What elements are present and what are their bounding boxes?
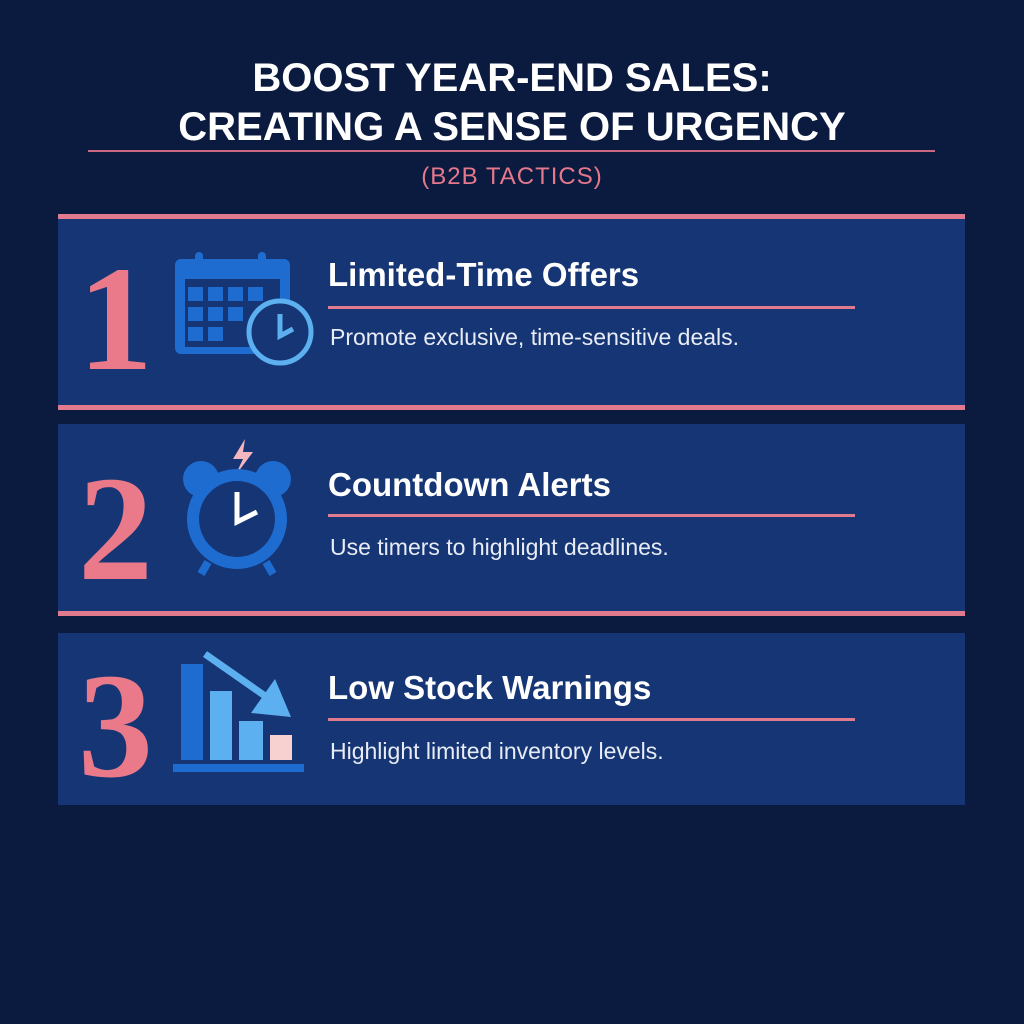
icon: alarm clock [183, 439, 291, 576]
title [178, 56, 846, 149]
number 3: 3 [78, 643, 153, 809]
panel: low stock warnings [58, 633, 965, 805]
icon: declining bar chart [173, 651, 304, 772]
number 1: 1 [78, 236, 153, 402]
icon: calendar clock [175, 252, 314, 366]
description: Highlight limited inventory levels. [330, 738, 664, 764]
description: Promote exclusive, time-sensitive deals. [330, 324, 739, 350]
title: BOOST YEAR-END SALES: [252, 56, 772, 100]
panel: countdown alerts [58, 424, 965, 616]
heading: Low Stock Warnings [328, 669, 651, 706]
subtitle: (B2B TACTICS) [421, 163, 603, 190]
description: Use timers to highlight deadlines. [330, 534, 669, 560]
heading: Countdown Alerts [328, 466, 611, 503]
heading: Limited-Time Offers [328, 256, 639, 293]
panel: limited-time offers [58, 214, 965, 410]
title: CREATING A SENSE OF URGENCY [178, 105, 846, 149]
number 2: 2 [78, 446, 153, 612]
